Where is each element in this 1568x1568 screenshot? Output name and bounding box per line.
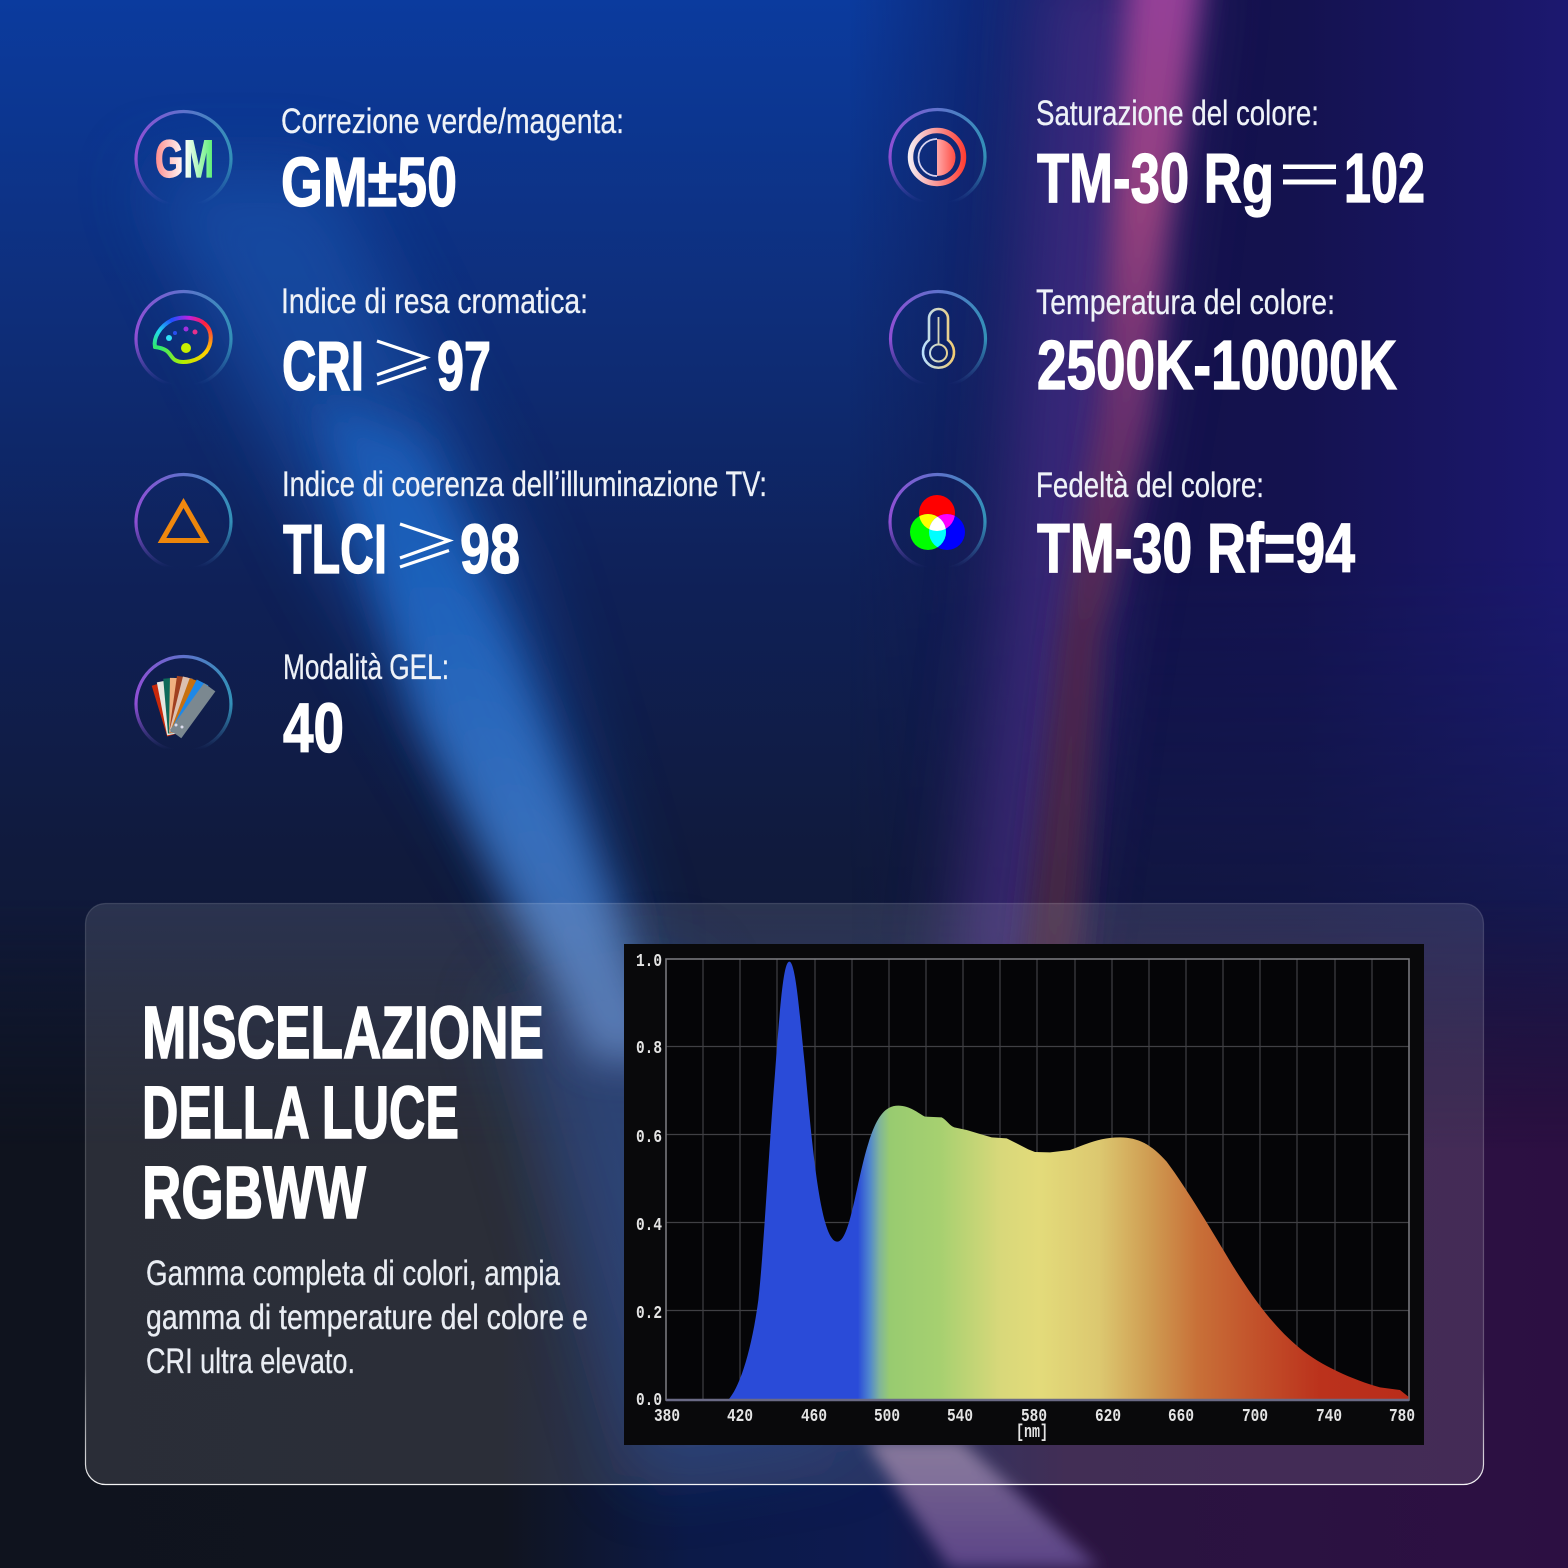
chart: light spectrum <box>624 944 1424 1445</box>
icon: thermometer <box>890 292 986 386</box>
y axis labels: 0.0 <box>636 1391 662 1411</box>
value: 40 <box>283 689 344 767</box>
spec: GEL modes <box>134 652 447 754</box>
x axis baseline <box>666 1399 1409 1401</box>
text block: description: CRI ultra elevato. <box>146 1342 355 1381</box>
y axis labels: 0.6 <box>636 1128 662 1148</box>
text block: description <box>146 1254 588 1381</box>
value: 102 <box>1344 139 1425 217</box>
label: Temperatura del colore: <box>1036 283 1335 322</box>
icon: GM: GM <box>155 130 214 189</box>
label: Fedeltà del colore: <box>1036 466 1264 505</box>
panel: light mixing <box>86 904 1484 1484</box>
x axis labels <box>654 1407 1415 1443</box>
y axis labels: 0.4 <box>636 1216 662 1236</box>
label: Correzione verde/magenta: <box>281 102 624 141</box>
spec: colour temperature <box>888 288 1398 390</box>
x axis labels: 620 <box>1095 1407 1121 1427</box>
icon: GM <box>136 112 231 206</box>
heading: RGBWW light mixing <box>142 991 544 1234</box>
label: Indice di coerenza dell’illuminazione TV: <box>282 465 767 504</box>
value: 97 <box>437 327 491 405</box>
y axis labels: 1.0 <box>636 952 662 972</box>
value: 2500K-10000K <box>1037 326 1397 404</box>
x axis labels: 540 <box>947 1407 973 1427</box>
value <box>283 510 520 588</box>
value: TLCI <box>283 510 387 588</box>
text block: description: gamma di temperature del colore e <box>146 1298 588 1337</box>
x axis labels: 420 <box>727 1407 753 1427</box>
x axis labels: 500 <box>874 1407 900 1427</box>
icon: RGB circles <box>890 474 985 570</box>
label: Modalità GEL: <box>283 648 449 687</box>
x axis labels: 740 <box>1316 1407 1342 1427</box>
heading: RGBWW light mixing: DELLA LUCE <box>142 1071 459 1154</box>
spectrum curve <box>729 962 1408 1399</box>
spec: colour fidelity <box>888 470 1356 574</box>
spec: colour saturation <box>890 94 1425 217</box>
icon: triangle <box>136 474 231 570</box>
x axis labels: 460 <box>801 1407 827 1427</box>
y axis labels: 0.2 <box>636 1304 662 1324</box>
x axis labels: 580 <box>1021 1407 1047 1427</box>
x axis labels: 660 <box>1168 1407 1194 1427</box>
icon: palette <box>136 292 231 386</box>
x axis labels: 700 <box>1242 1407 1268 1427</box>
icon: saturation <box>890 110 985 204</box>
value <box>282 327 491 405</box>
x axis labels: 780 <box>1389 1407 1415 1427</box>
heading: RGBWW light mixing: MISCELAZIONE <box>142 991 544 1074</box>
y axis labels: 0.8 <box>636 1039 662 1059</box>
value: TM-30 Rg <box>1037 139 1274 217</box>
icon: gel swatch fan <box>136 656 231 752</box>
value: CRI <box>282 327 364 405</box>
value: 98 <box>460 510 520 588</box>
label: Saturazione del colore: <box>1036 94 1319 133</box>
spec: green/magenta correction <box>134 107 622 208</box>
spec: colour rendering index <box>134 287 586 392</box>
value: GM±50 <box>281 143 457 221</box>
label: Indice di resa cromatica: <box>281 282 588 321</box>
x axis labels: [nm] <box>1016 1423 1048 1443</box>
spec: TV lighting consistency index <box>134 470 765 574</box>
x axis labels: 380 <box>654 1407 680 1427</box>
value: TM-30 Rf=94 <box>1037 509 1355 587</box>
y axis labels <box>636 952 662 1411</box>
heading: RGBWW light mixing: RGBWW <box>142 1151 366 1234</box>
text block: description: Gamma completa di colori, ampia <box>146 1254 560 1293</box>
